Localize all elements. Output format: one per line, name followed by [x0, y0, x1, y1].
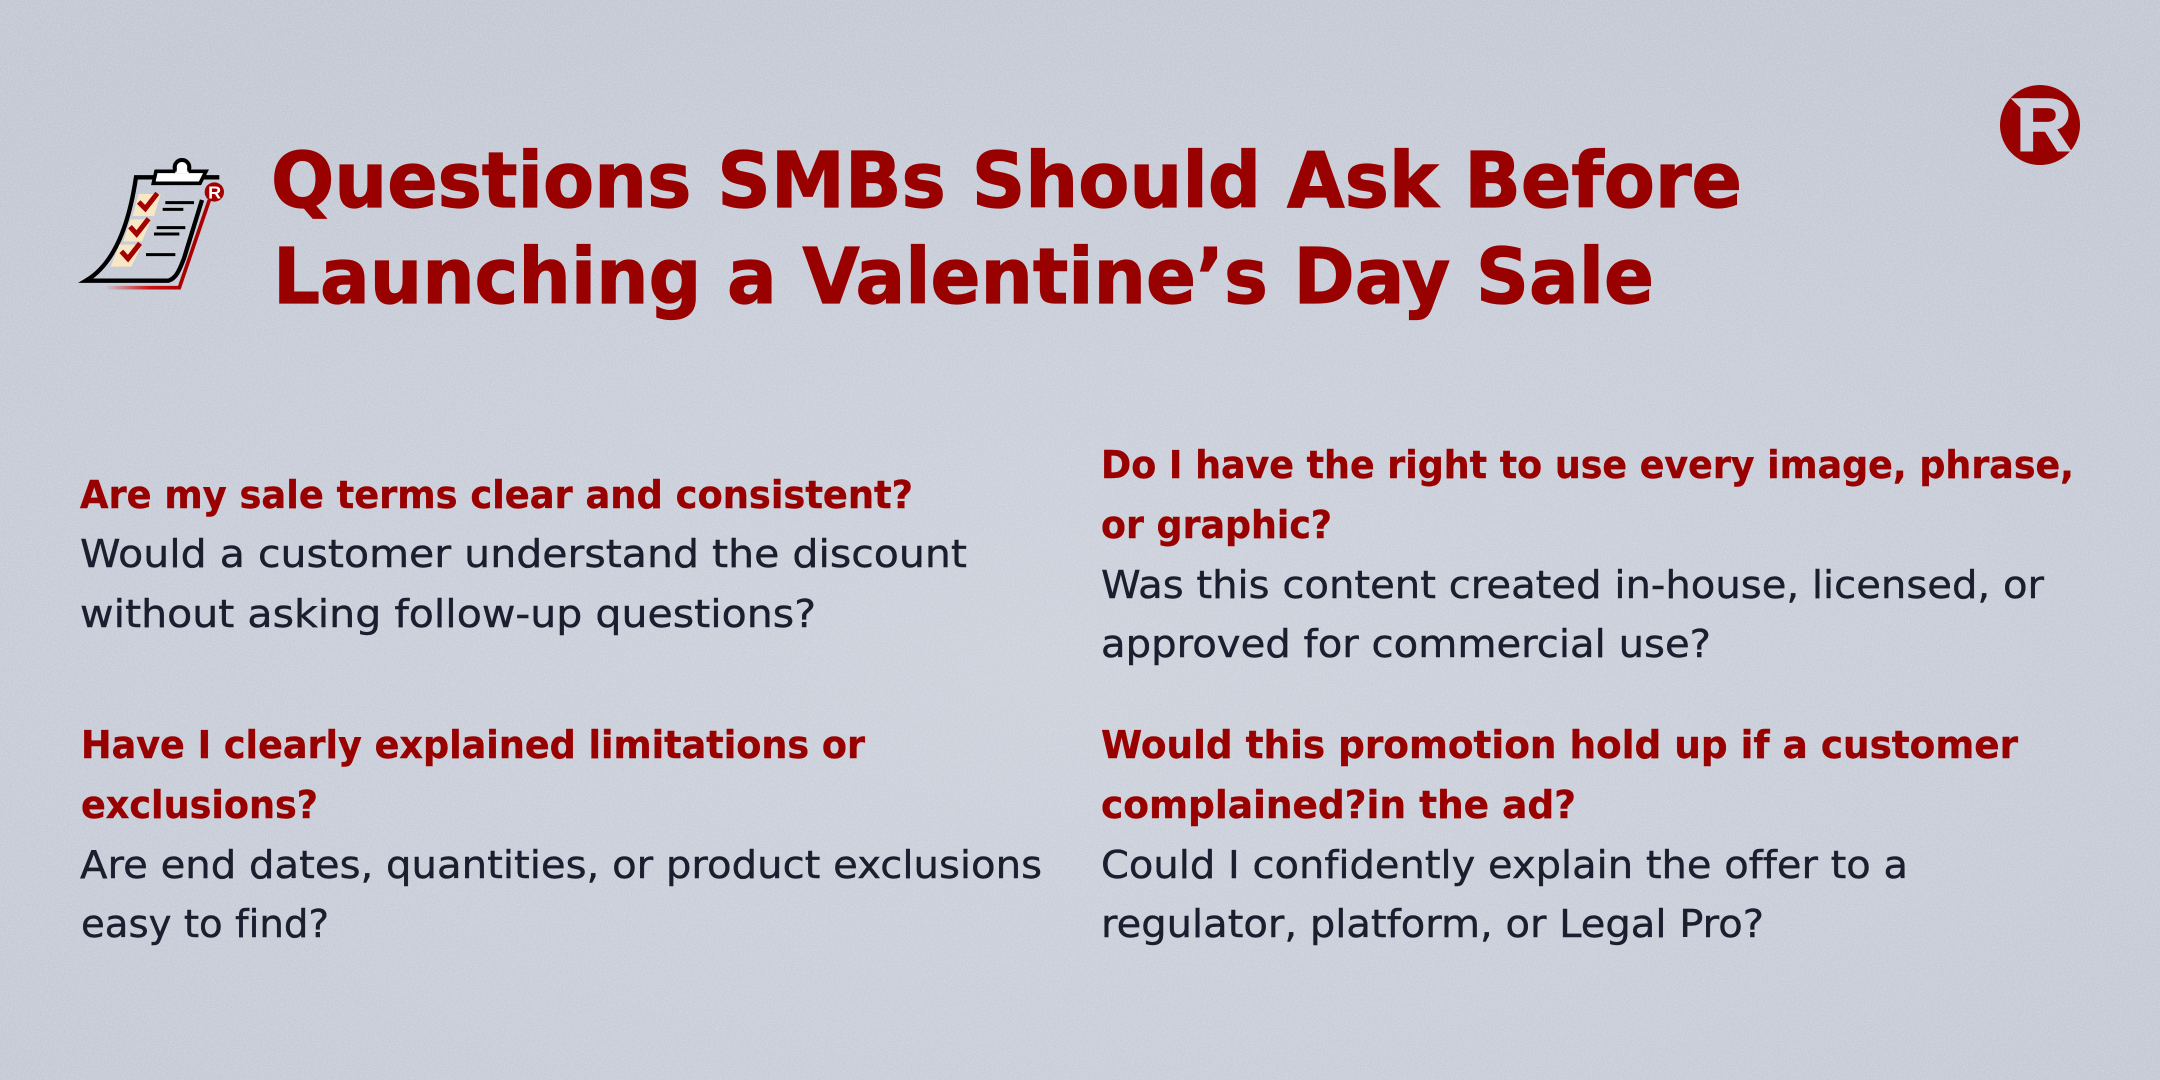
question block: customer complaint: Could I confidently explain the offer to a — [1101, 843, 1908, 887]
question block: image rights: Was this content created in-house, licensed, or — [1101, 563, 2044, 607]
question block: customer complaint: Would this promotion hold up if a customer — [1101, 723, 2018, 767]
logo: R badge: R — [2016, 82, 2072, 166]
logo: R badge — [2000, 82, 2080, 166]
question block: customer complaint: regulator, platform, or Legal Pro? — [1101, 902, 1764, 946]
question block: image rights — [1101, 443, 2074, 666]
title: Launching a Valentine’s Day Sale — [273, 233, 1654, 322]
question block: customer complaint: complained?in the ad? — [1101, 783, 1576, 827]
question block: sale terms: Would a customer understand the discount — [80, 532, 967, 576]
question block: limitations: Have I clearly explained limitations or — [81, 723, 865, 767]
icon: clipboard checklist — [86, 160, 224, 288]
question block: limitations — [80, 723, 1042, 946]
question block: limitations: easy to find? — [81, 902, 329, 946]
question block: limitations: exclusions? — [81, 783, 318, 827]
question block: image rights: or graphic? — [1101, 503, 1332, 547]
question block: customer complaint — [1101, 723, 2018, 946]
question block: image rights: approved for commercial use? — [1101, 622, 1711, 666]
question block: sale terms: Are my sale terms clear and consistent? — [80, 473, 913, 517]
title — [271, 137, 1742, 322]
title: Questions SMBs Should Ask Before — [271, 137, 1742, 226]
question block: limitations: Are end dates, quantities, or product exclusions — [80, 843, 1042, 887]
question block: sale terms: without asking follow-up questions? — [80, 592, 816, 636]
question block: image rights: Do I have the right to use every image, phrase, — [1101, 443, 2074, 487]
question block: sale terms — [80, 473, 967, 636]
icon: clipboard checklist: R — [208, 182, 221, 202]
